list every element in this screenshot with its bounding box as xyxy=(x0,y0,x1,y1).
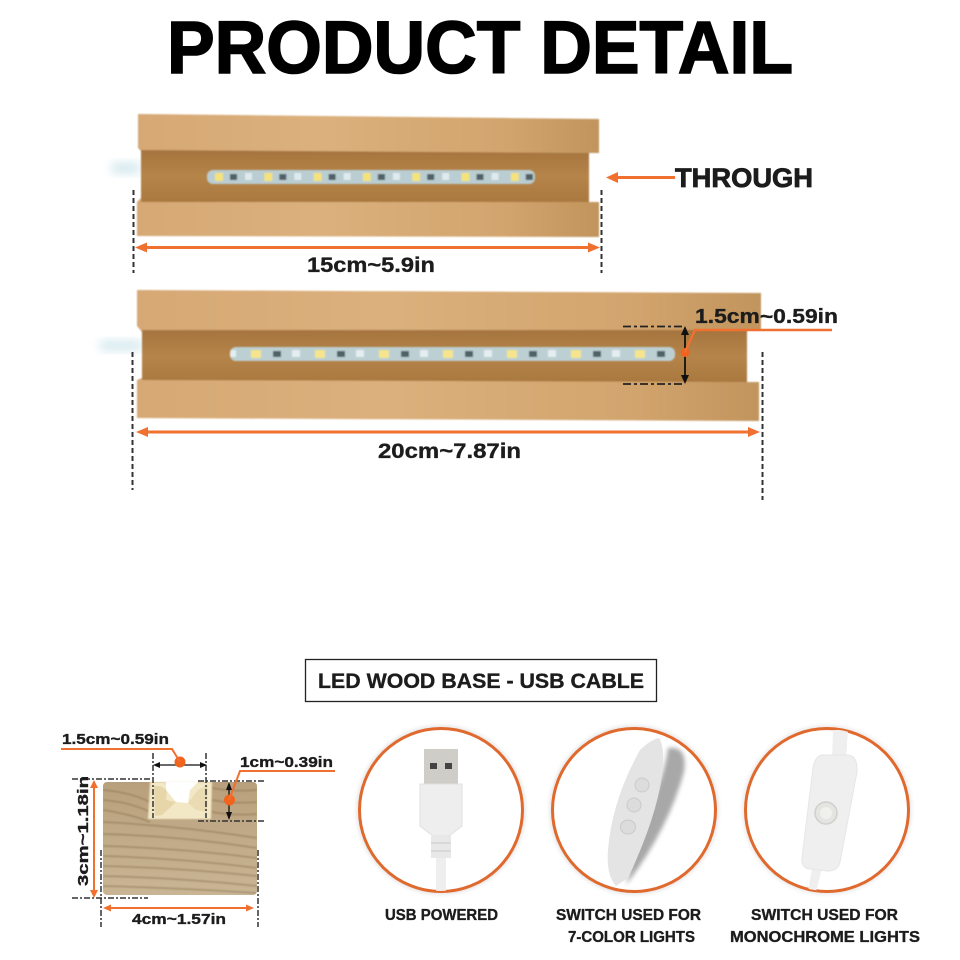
dimension: 20cm width: 20cm~7.87in xyxy=(378,440,521,463)
notch xyxy=(148,782,212,819)
dimension: 1.5cm channel height: 1.5cm~0.59in xyxy=(695,306,838,328)
dimension: 1cm depth xyxy=(224,754,335,820)
caption: monochrome switch: MONOCHROME LIGHTS xyxy=(730,929,920,946)
dimension: 4cm width: 4cm~1.57in xyxy=(132,911,226,928)
title: PRODUCT DETAIL xyxy=(167,6,793,89)
callout: through: THROUGH xyxy=(675,163,813,193)
caption: monochrome switch xyxy=(730,907,920,946)
dimension: 20cm width xyxy=(132,352,762,500)
wood body xyxy=(137,290,761,421)
icon: monochrome switch in circle xyxy=(745,728,909,892)
caption: 7-color switch: 7-COLOR LIGHTS xyxy=(568,929,695,946)
icon: USB plug in circle xyxy=(359,728,523,894)
dimension: 4cm width xyxy=(103,904,254,928)
caption: 7-color switch xyxy=(556,907,701,946)
panel: cross section diagram xyxy=(61,731,335,928)
caption: USB powered: USB POWERED xyxy=(385,907,498,924)
panel: 20cm wood base xyxy=(100,290,761,421)
LED strip xyxy=(230,347,675,361)
switch shadow xyxy=(626,748,685,885)
dimension: 15cm width xyxy=(134,190,602,277)
dimension: 1.5cm width xyxy=(61,731,207,768)
dimension: 15cm width: 15cm~5.9in xyxy=(307,254,435,277)
wood body xyxy=(137,114,599,237)
caption: monochrome switch: SWITCH USED FOR xyxy=(751,907,898,924)
callout: through xyxy=(606,163,813,193)
cable glow xyxy=(100,341,142,350)
guide lines xyxy=(72,753,266,927)
wood block xyxy=(103,782,257,895)
dimension: 3cm height: 3cm~1.18in xyxy=(75,776,92,886)
dimension: 1cm depth: 1cm~0.39in xyxy=(240,754,333,771)
switch body xyxy=(608,738,663,886)
caption: 7-color switch: SWITCH USED FOR xyxy=(556,907,701,924)
icon: 7-color switch in circle xyxy=(552,728,716,892)
cable glow xyxy=(112,163,140,173)
LED strip xyxy=(207,170,535,184)
dimension: 1.5cm channel height xyxy=(623,306,838,384)
heading box: LED wood base: LED WOOD BASE - USB CABLE xyxy=(318,670,644,693)
dimension: 3cm height xyxy=(75,776,98,898)
dimension: 1.5cm width: 1.5cm~0.59in xyxy=(62,731,169,748)
heading box: LED wood base xyxy=(306,660,656,702)
panel: 15cm wood base xyxy=(112,114,599,237)
